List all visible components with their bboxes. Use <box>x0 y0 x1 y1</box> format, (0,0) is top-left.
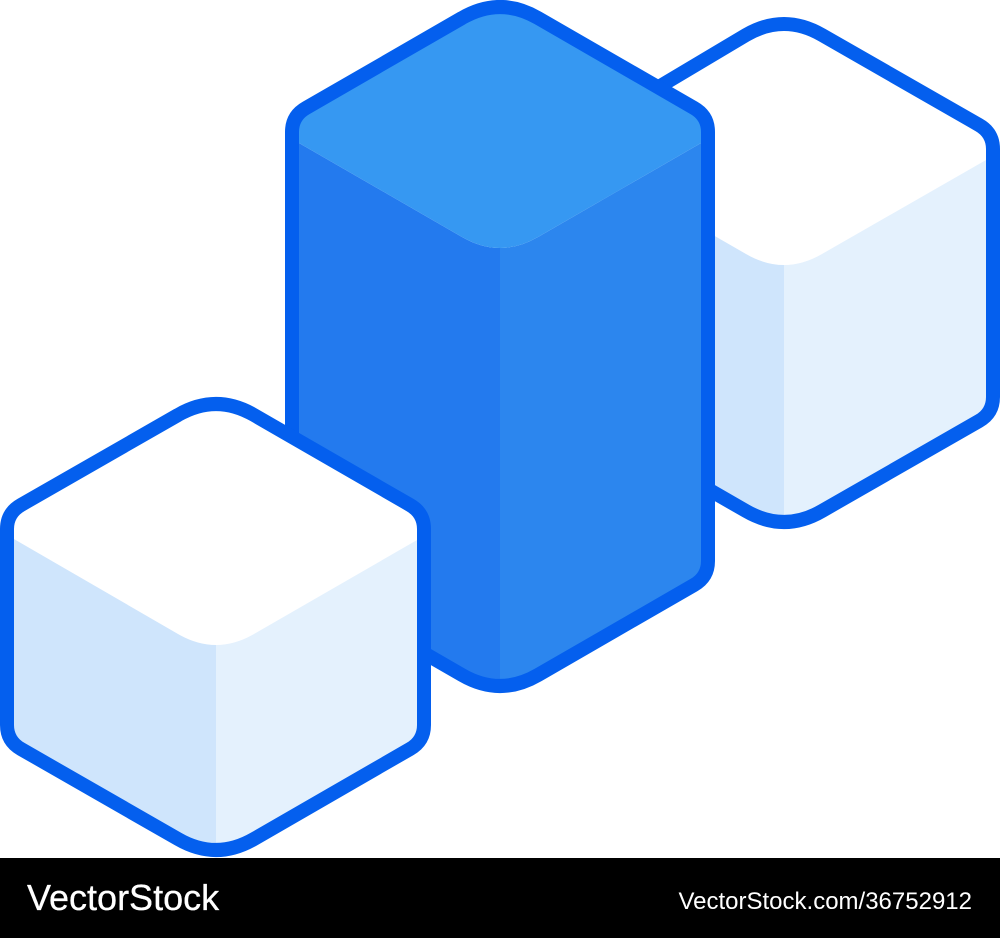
image url text: VectorStock.com/36752912 <box>678 888 972 915</box>
brand logo text: VectorStock <box>27 877 219 918</box>
icon: tall blue block <box>292 7 708 686</box>
icon: right white cube <box>600 24 993 522</box>
icon: left white cube <box>7 404 424 850</box>
footer bar <box>0 858 1000 938</box>
